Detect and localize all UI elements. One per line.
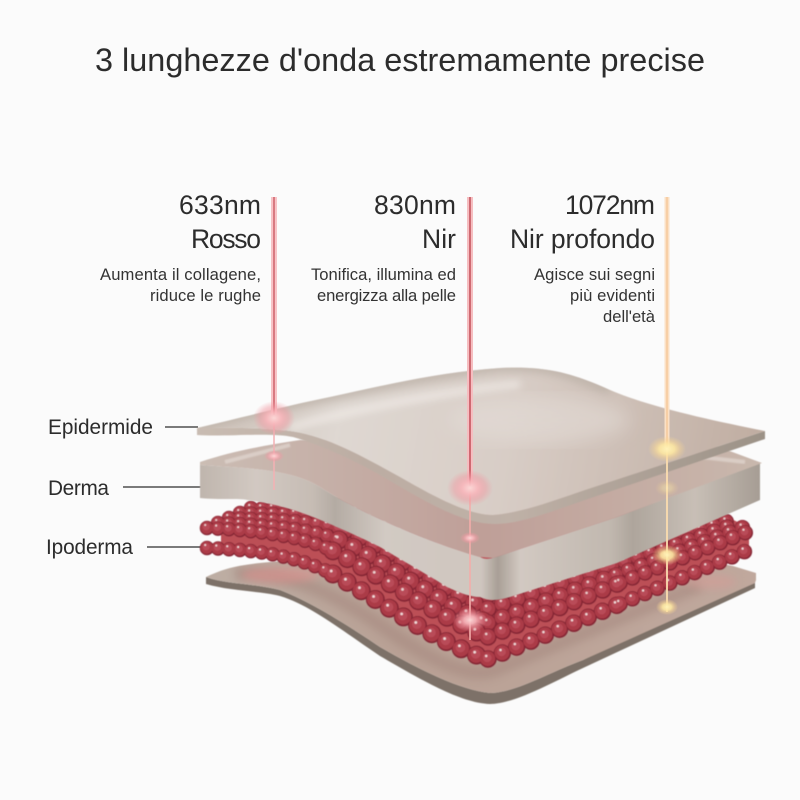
text block: 1072nm Nir profondo: Agisce sui segni — [534, 265, 655, 284]
text block: 830nm Nir: energizza alla pelle — [317, 286, 456, 305]
glow spot: pink on derma — [460, 532, 480, 544]
beam: 1072nm deep near infrared — [648, 197, 686, 612]
text block: 633nm Rosso: Aumenta il collagene, — [100, 265, 261, 284]
beam: 633nm red — [253, 197, 295, 490]
text block: 633nm Rosso: 633nm — [179, 190, 261, 220]
text block: 1072nm Nir profondo: 1072nm — [565, 190, 655, 220]
glow spot: red on derma — [264, 450, 284, 462]
glow spot: yellow on derma — [655, 480, 679, 496]
title: 3 lunghezze d'onda estremamente precise — [95, 42, 705, 78]
glow spot: red on epidermis — [253, 401, 295, 435]
text block: 830nm Nir: Nir — [422, 224, 456, 254]
layer label: Derma: Derma — [48, 477, 109, 500]
text block: 1072nm Nir profondo — [510, 190, 656, 326]
glow spot: pink on spheres — [453, 608, 487, 632]
text block: 830nm Nir: Tonifica, illumina ed — [311, 265, 456, 284]
text block: 633nm Rosso: Rosso — [191, 224, 261, 254]
glow spot: pink on epidermis — [447, 470, 493, 506]
text block: 830nm Nir: 830nm — [374, 190, 456, 220]
layer label: Ipoderma: Ipoderma — [46, 536, 133, 559]
layer label: Epidermide: Epidermide — [48, 416, 153, 439]
illustration: bottom plate — [206, 560, 756, 704]
illustration: hypodermis spheres — [205, 500, 753, 659]
text block: 633nm Rosso: riduce le rughe — [150, 286, 261, 305]
illustration: derma layer — [200, 440, 762, 600]
glow spot: yellow on spheres — [652, 545, 682, 565]
text block: 1072nm Nir profondo: dell'età — [603, 307, 656, 326]
text block: 633nm Rosso — [100, 190, 261, 305]
text block: 1072nm Nir profondo: più evidenti — [570, 286, 655, 305]
illustration: epidermis layer — [197, 366, 765, 524]
text block: 830nm Nir — [311, 190, 456, 305]
beam: 830nm near infrared — [447, 197, 493, 640]
text block: 1072nm Nir profondo: Nir profondo — [510, 224, 655, 254]
glow spot: yellow on bottom plate — [656, 599, 678, 615]
glow spot: yellow on epidermis — [648, 436, 686, 462]
